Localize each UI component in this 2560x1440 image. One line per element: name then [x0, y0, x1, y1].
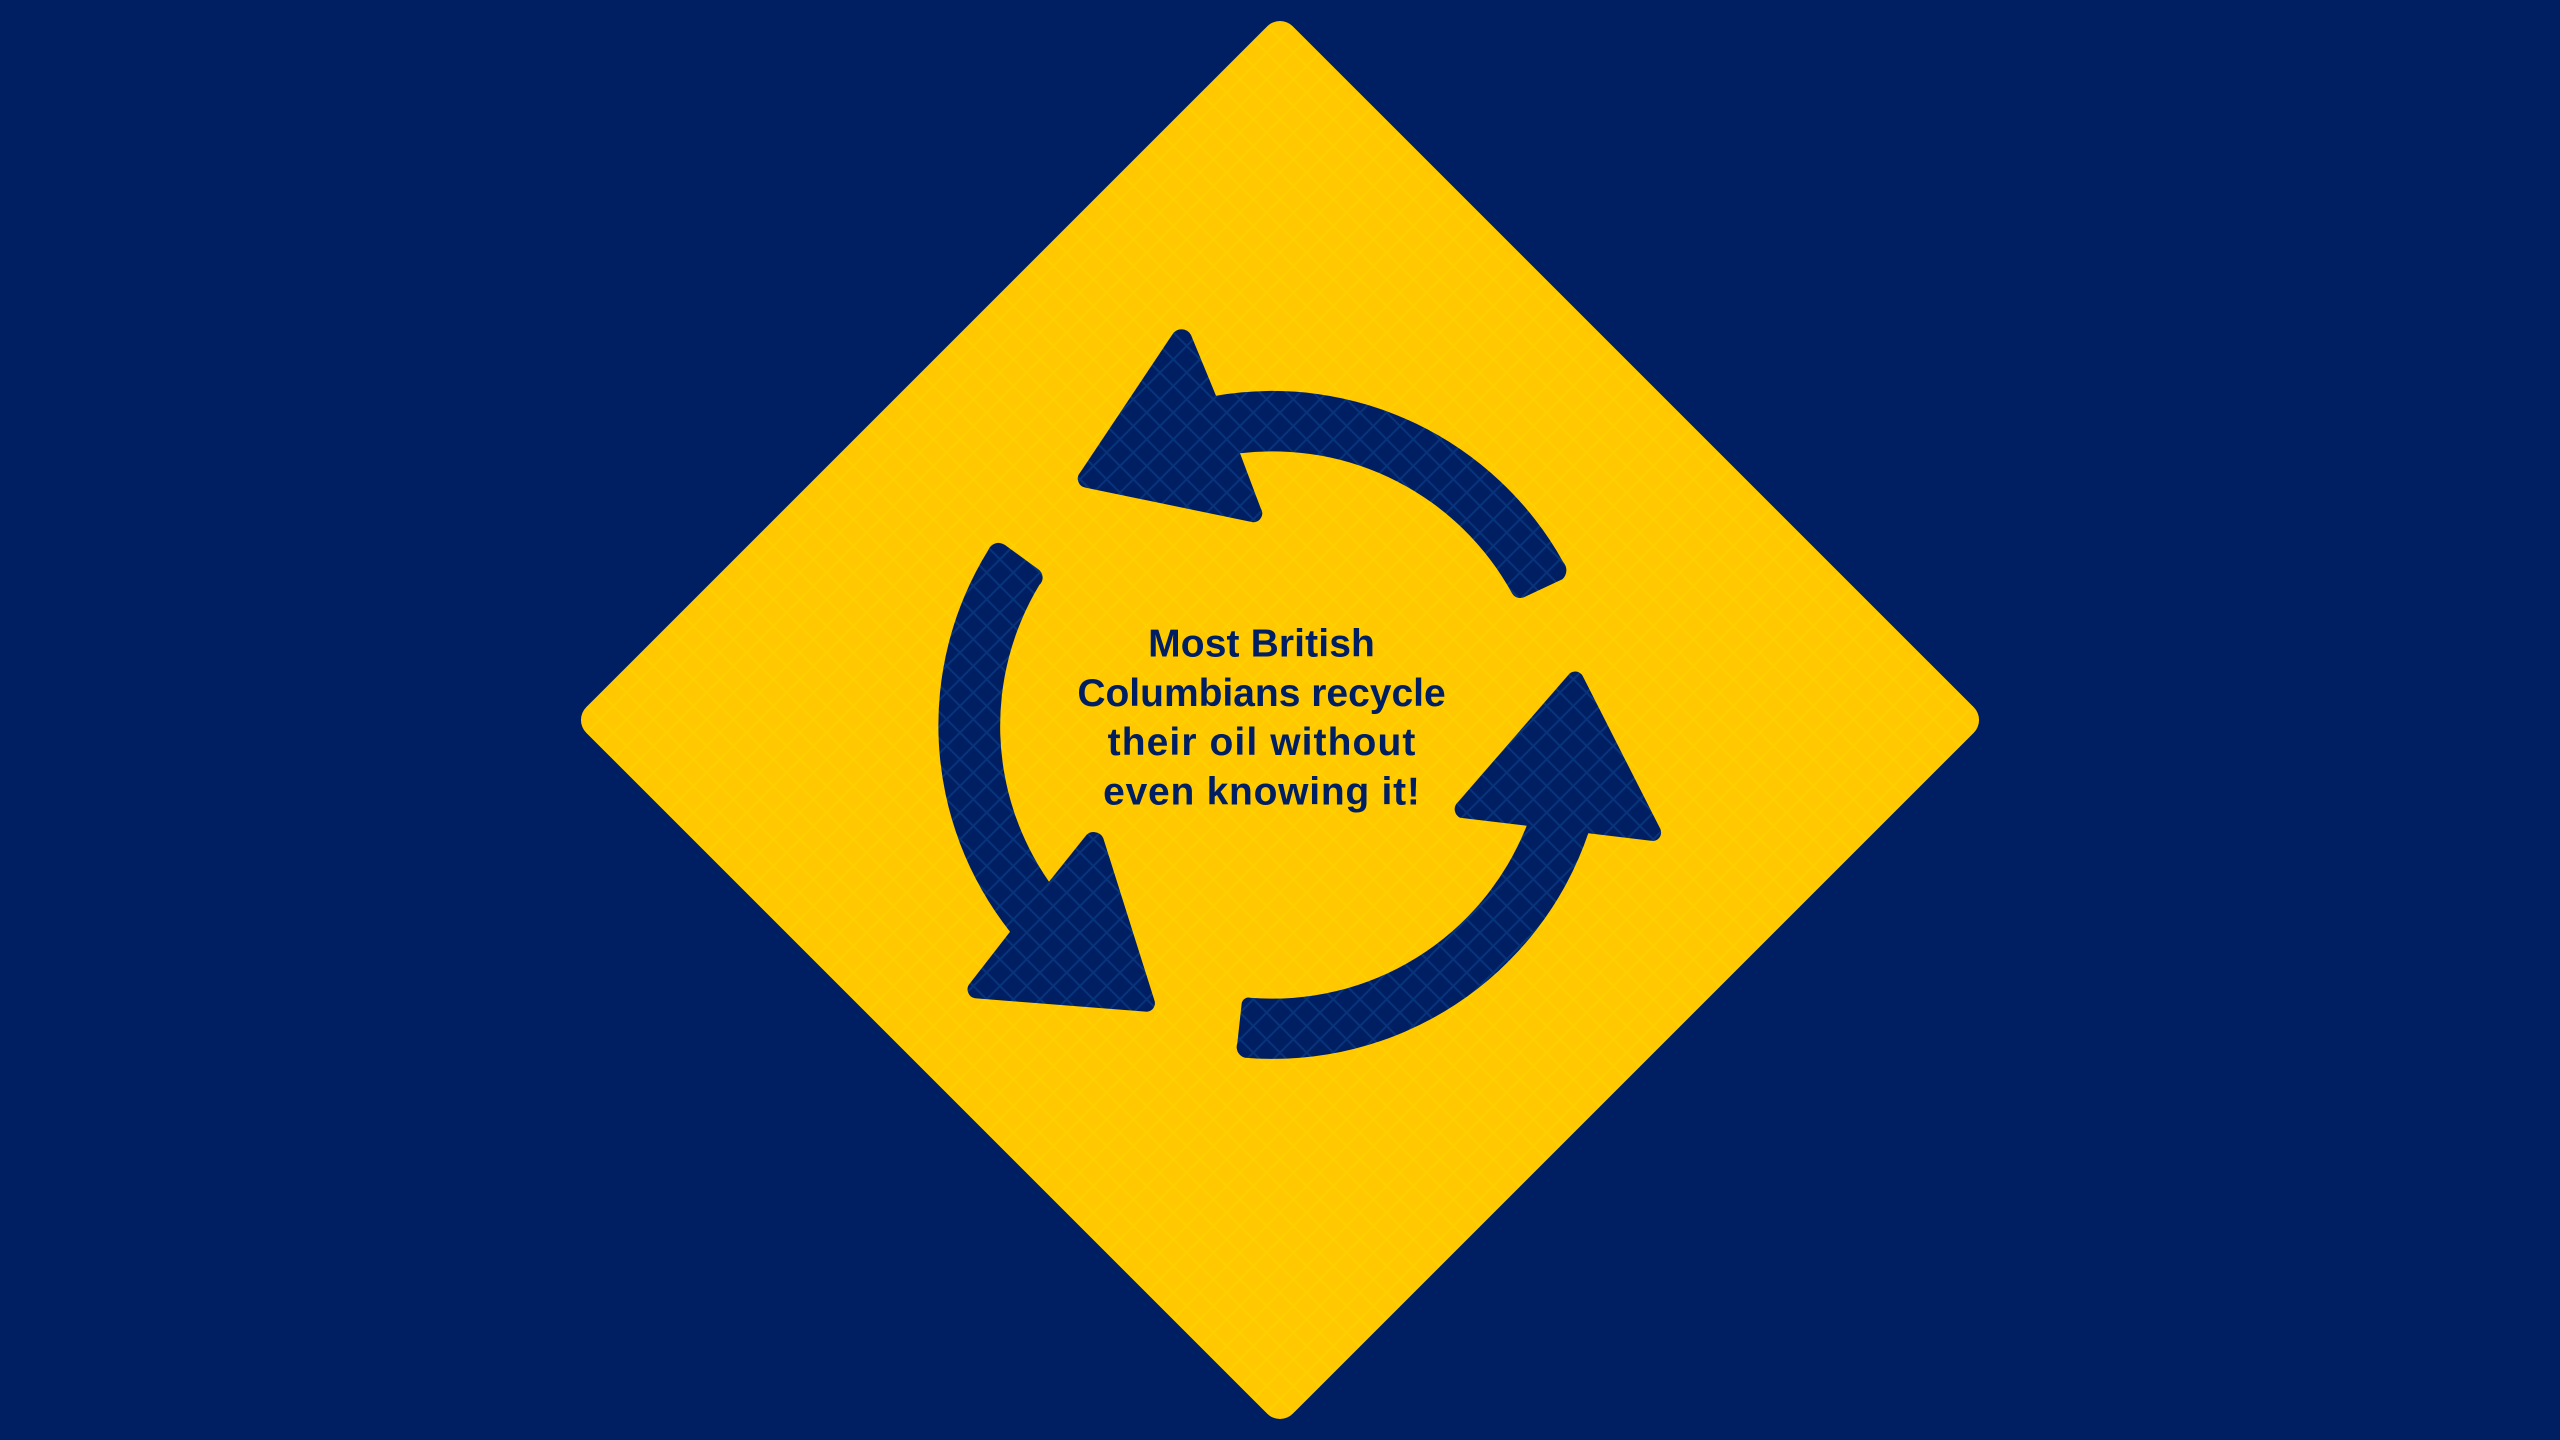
central message: Most British — [1148, 622, 1375, 666]
yellow diamond road sign — [581, 21, 1979, 1419]
central message: even knowing it! — [1103, 770, 1420, 813]
arrow: left — [938, 543, 1155, 1012]
central message: Columbians recycle — [1077, 672, 1446, 715]
central message — [1077, 622, 1446, 813]
arrow: right — [1237, 671, 1661, 1059]
recycling arrows — [938, 329, 1661, 1059]
central message: their oil without — [1108, 721, 1415, 764]
arrow: top — [1078, 329, 1566, 598]
